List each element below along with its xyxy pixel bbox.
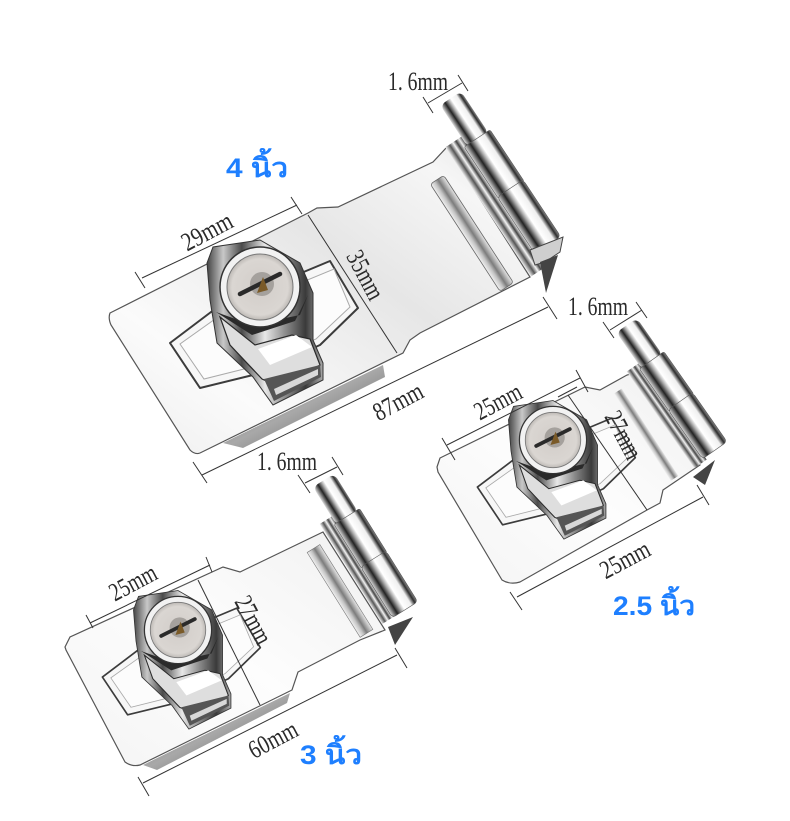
hinge tab	[388, 617, 413, 645]
steel plate	[65, 532, 385, 766]
steel plate	[109, 147, 530, 454]
lock	[170, 240, 358, 405]
dimensions: 2.5 inch: 27mm	[599, 406, 648, 464]
slot	[430, 175, 513, 291]
lock	[477, 401, 635, 539]
dimensions: 4 inch: 1. 6mm	[388, 67, 448, 96]
dimensions: 3 inch: 60mm	[243, 714, 303, 765]
dimensions: 4 inch: 29mm	[176, 206, 238, 257]
slot	[307, 545, 373, 637]
dimensions: 3 inch	[86, 447, 407, 796]
dimensions: 2.5 inch: 25mm	[595, 534, 655, 585]
dimensions: 2.5 inch: 25mm	[469, 377, 527, 426]
hinge tab	[693, 460, 715, 485]
dimensions: 3 inch: 1. 6mm	[257, 447, 317, 476]
dimensions: 3 inch: 25mm	[104, 558, 162, 607]
label: 3 inch: 3 นิ้ว	[300, 734, 362, 770]
lower lip shadow	[223, 365, 385, 448]
label: 2.5 inch: 2.5 นิ้ว	[613, 585, 695, 621]
hinge barrel and leaf	[605, 316, 729, 468]
hasp: 3 inch	[65, 472, 418, 770]
hasp: 2.5 inch	[437, 316, 729, 583]
lock	[102, 591, 260, 729]
dimensions: 4 inch: 35mm	[340, 245, 391, 305]
steel plate	[437, 372, 700, 583]
hinge screw and tab	[530, 237, 563, 265]
dimensions: 4 inch	[135, 67, 557, 483]
dimensions: 2.5 inch: 1. 6mm	[568, 292, 628, 321]
lower lip shadow	[143, 693, 290, 770]
dimensions: 2.5 inch	[442, 292, 709, 610]
hinge barrel and leaf	[424, 90, 570, 277]
hinge barrel and leaf	[301, 472, 418, 624]
label: 4 inch: 4 นิ้ว	[226, 147, 288, 183]
slot	[614, 389, 678, 481]
dimensions: 4 inch: 87mm	[368, 376, 428, 427]
dimensions: 3 inch: 27mm	[229, 591, 278, 649]
hasp: 4 inch	[109, 90, 570, 454]
